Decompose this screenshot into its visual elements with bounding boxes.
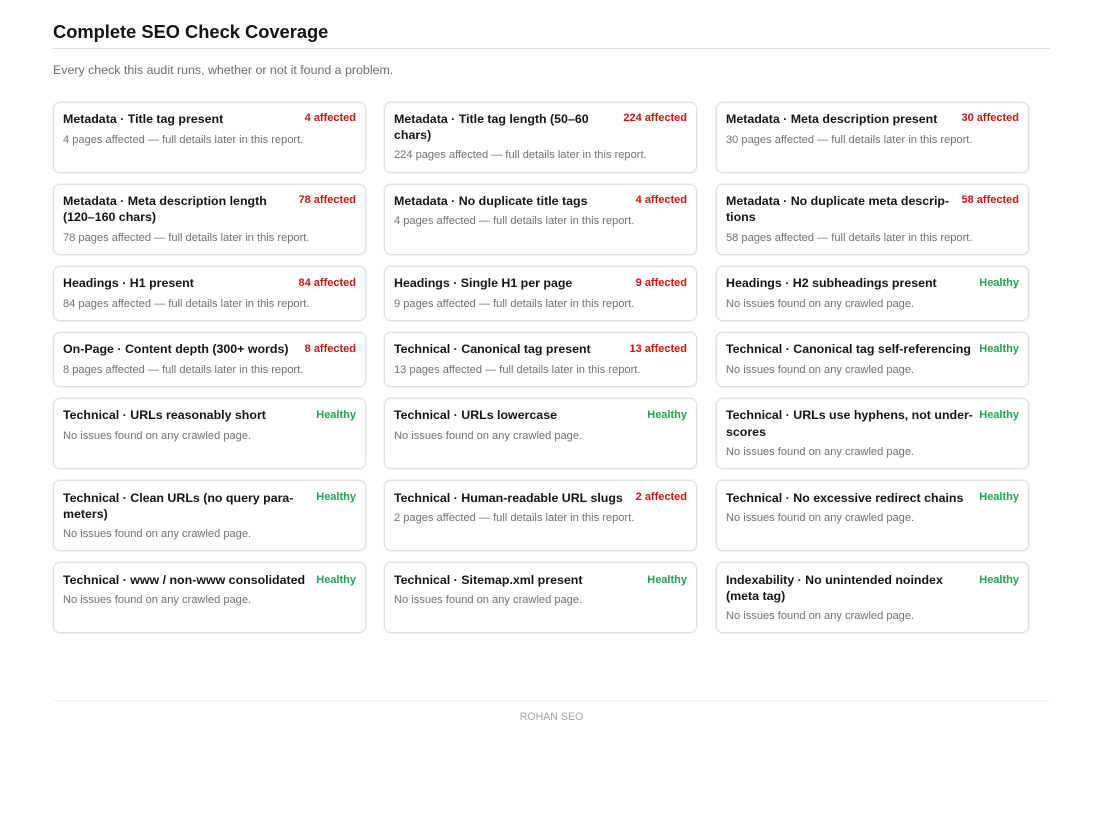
card: Canonical tag present: 13 pages affected — full details later in this report. xyxy=(394,364,640,376)
card: Clean URLs: Healthy xyxy=(316,491,356,503)
card: Clean URLs: No issues found on any crawled page. xyxy=(63,528,251,540)
card: Content depth: 8 affected xyxy=(305,343,356,355)
card: No unintended noindex: Indexability · No unintended noindex xyxy=(726,573,943,587)
card: Title tag present: 4 affected xyxy=(305,112,356,124)
card: Canonical self-referencing xyxy=(716,332,1029,387)
card: No duplicate meta descriptions xyxy=(716,184,1029,255)
card: Sitemap.xml present xyxy=(384,562,697,633)
card: Meta description present: 30 pages affected — full details later in this report. xyxy=(726,134,972,146)
card: Canonical self-referencing: Technical · Canonical tag self-referencing xyxy=(726,342,971,356)
footer: ROHAN SEO xyxy=(520,711,583,723)
card: No excessive redirect chains: No issues found on any crawled page. xyxy=(726,512,914,524)
card: URLs lowercase: No issues found on any crawled page. xyxy=(394,430,582,442)
card: Canonical tag present xyxy=(384,332,697,387)
card: No unintended noindex: (meta tag) xyxy=(726,589,785,603)
subtitle: Every check this audit runs, whether or not it found a problem. xyxy=(53,63,393,77)
card: Canonical tag present: 13 affected xyxy=(630,343,687,355)
card: No duplicate meta descriptions: 58 pages affected — full details later in this report. xyxy=(726,232,972,244)
card: URLs use hyphens xyxy=(716,398,1029,469)
card: www consolidated: No issues found on any crawled page. xyxy=(63,594,251,606)
card: Meta description length xyxy=(53,184,366,255)
card: Meta description length: 78 affected xyxy=(299,194,356,206)
card: No unintended noindex: No issues found on any crawled page. xyxy=(726,610,914,622)
card: H2 subheadings present: No issues found on any crawled page. xyxy=(726,298,914,310)
card: URLs lowercase xyxy=(384,398,697,469)
card: URLs reasonably short: No issues found on any crawled page. xyxy=(63,430,251,442)
card: H2 subheadings present: Healthy xyxy=(979,277,1019,289)
card: No excessive redirect chains: Technical · No excessive redirect chains xyxy=(726,491,963,505)
card: No duplicate title tags xyxy=(384,184,697,255)
card: Human-readable URL slugs: 2 pages affected — full details later in this report. xyxy=(394,512,634,524)
card: Meta description present: Metadata · Meta description present xyxy=(726,112,937,126)
card: Single H1 per page: Headings · Single H1 per page xyxy=(394,276,572,290)
card: Meta description length: (120–160 chars) xyxy=(63,210,156,224)
card: URLs use hyphens: No issues found on any crawled page. xyxy=(726,446,914,458)
card: URLs lowercase: Healthy xyxy=(647,409,687,421)
card: No duplicate meta descriptions: 58 affected xyxy=(962,194,1019,206)
card: Sitemap.xml present: Technical · Sitemap.xml present xyxy=(394,573,582,587)
card: URLs lowercase: Technical · URLs lowercase xyxy=(394,408,557,422)
card: Single H1 per page: 9 pages affected — full details later in this report. xyxy=(394,298,634,310)
card: No unintended noindex xyxy=(716,562,1029,633)
card: No duplicate title tags: 4 affected xyxy=(636,194,687,206)
card: Clean URLs: Technical · Clean URLs (no query para- xyxy=(63,491,293,505)
card: Canonical self-referencing: No issues found on any crawled page. xyxy=(726,364,914,376)
card: Content depth: 8 pages affected — full details later in this report. xyxy=(63,364,303,376)
card: Meta description present xyxy=(716,102,1029,173)
card: Meta description present: 30 affected xyxy=(962,112,1019,124)
card: Title tag present xyxy=(53,102,366,173)
card: URLs reasonably short xyxy=(53,398,366,469)
card: Clean URLs xyxy=(53,480,366,551)
card: Meta description length: Metadata · Meta description length xyxy=(63,194,267,208)
card: H2 subheadings present xyxy=(716,266,1029,321)
card: Content depth xyxy=(53,332,366,387)
card: No duplicate title tags: Metadata · No duplicate title tags xyxy=(394,194,587,208)
card: Sitemap.xml present: Healthy xyxy=(647,574,687,586)
card: URLs reasonably short: Healthy xyxy=(316,409,356,421)
card: URLs use hyphens: Technical · URLs use hyphens, not under- xyxy=(726,408,973,422)
card: Title tag length: 224 affected xyxy=(623,112,687,124)
card: Human-readable URL slugs: Technical · Human-readable URL slugs xyxy=(394,491,623,505)
card: Meta description length: 78 pages affected — full details later in this report. xyxy=(63,232,309,244)
card: Title tag present: Metadata · Title tag present xyxy=(63,112,223,126)
card: No duplicate meta descriptions: Metadata · No duplicate meta descrip- xyxy=(726,194,949,208)
card: Title tag length: chars) xyxy=(394,128,431,142)
title: Complete SEO Check Coverage xyxy=(53,21,328,42)
card: Sitemap.xml present: No issues found on any crawled page. xyxy=(394,594,582,606)
card: Title tag length xyxy=(384,102,697,173)
card: Clean URLs: meters) xyxy=(63,507,108,521)
card: www consolidated: Technical · www / non-www consolidated xyxy=(63,573,305,587)
card: H1 present: 84 affected xyxy=(299,277,356,289)
card: No excessive redirect chains xyxy=(716,480,1029,551)
card: No excessive redirect chains: Healthy xyxy=(979,491,1019,503)
card: Canonical tag present: Technical · Canonical tag present xyxy=(394,342,591,356)
card: H2 subheadings present: Headings · H2 subheadings present xyxy=(726,276,937,290)
card: www consolidated xyxy=(53,562,366,633)
card: Content depth: On-Page · Content depth (300+ words) xyxy=(63,342,288,356)
card: URLs use hyphens: Healthy xyxy=(979,409,1019,421)
card: www consolidated: Healthy xyxy=(316,574,356,586)
card: No unintended noindex: Healthy xyxy=(979,574,1019,586)
card: URLs use hyphens: scores xyxy=(726,425,766,439)
card: H1 present: Headings · H1 present xyxy=(63,276,194,290)
card: Title tag present: 4 pages affected — full details later in this report. xyxy=(63,134,303,146)
card: No duplicate meta descriptions: tions xyxy=(726,210,756,224)
card: Title tag length: Metadata · Title tag length (50–60 xyxy=(394,112,589,126)
card: Title tag length: 224 pages affected — full details later in this report. xyxy=(394,149,647,161)
card: No duplicate title tags: 4 pages affected — full details later in this report. xyxy=(394,215,634,227)
card: Human-readable URL slugs xyxy=(384,480,697,551)
card: URLs reasonably short: Technical · URLs reasonably short xyxy=(63,408,266,422)
card: Single H1 per page: 9 affected xyxy=(636,277,687,289)
card: Canonical self-referencing: Healthy xyxy=(979,343,1019,355)
card: H1 present xyxy=(53,266,366,321)
card: Single H1 per page xyxy=(384,266,697,321)
card: H1 present: 84 pages affected — full details later in this report. xyxy=(63,298,309,310)
card: Human-readable URL slugs: 2 affected xyxy=(636,491,687,503)
